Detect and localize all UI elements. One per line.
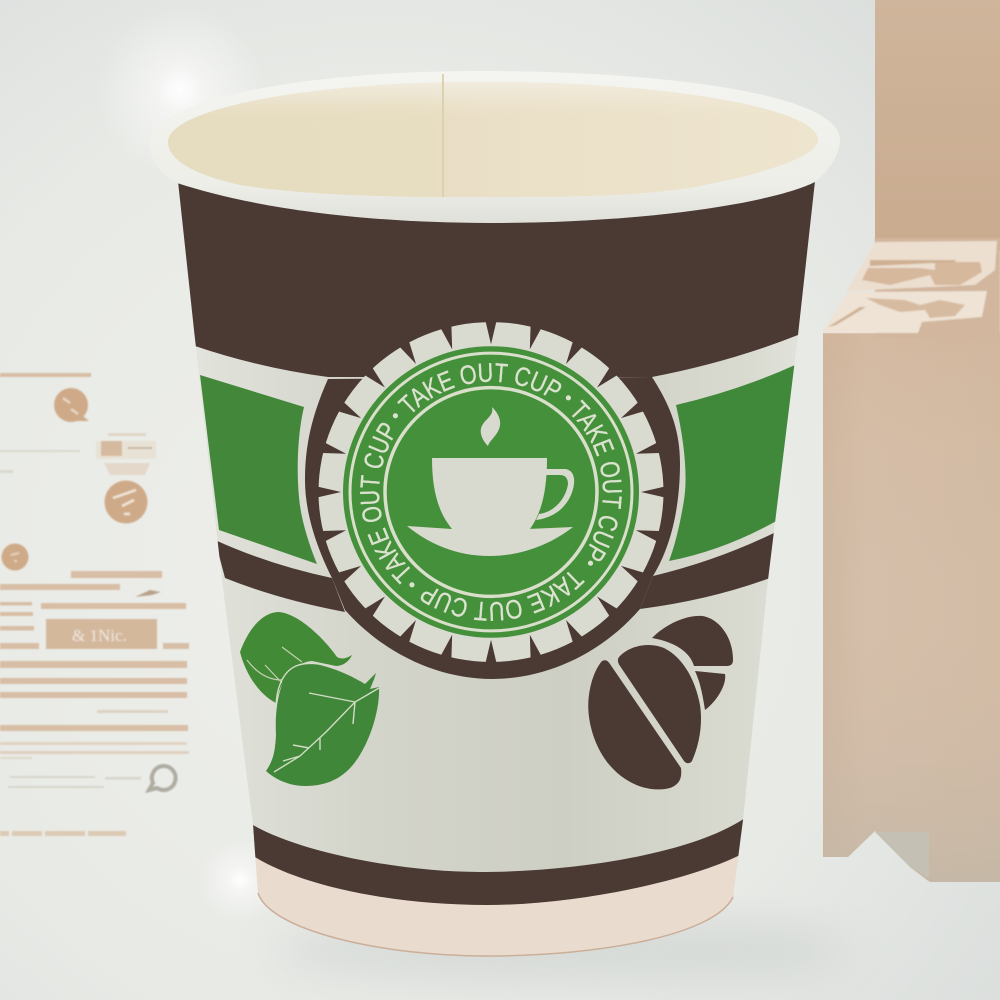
outer white ring xyxy=(350,353,632,631)
saucer xyxy=(407,526,573,556)
label block xyxy=(46,619,157,649)
medallion xyxy=(305,322,680,679)
icon: round badge xyxy=(104,480,148,524)
icon: label box xyxy=(96,433,156,475)
icon: green leaves xyxy=(240,612,379,786)
seam xyxy=(442,74,444,197)
cup bowl xyxy=(432,458,547,529)
panel: upper cardboard box xyxy=(875,0,1000,250)
rim xyxy=(150,71,840,223)
circular text: TAKE OUT CUP xyxy=(572,400,622,562)
separator dots xyxy=(392,394,594,588)
circular text: TAKE OUT CUP xyxy=(420,572,585,621)
text bars xyxy=(0,571,189,649)
top brown band xyxy=(170,170,830,377)
back leaf xyxy=(240,612,352,703)
front leaf xyxy=(266,664,379,786)
lower brown band xyxy=(215,530,780,612)
paper wall xyxy=(196,335,798,872)
big bean left half xyxy=(588,660,681,789)
label block: & 1Nic. xyxy=(72,626,127,645)
inner white ring xyxy=(385,388,597,596)
small grey lines xyxy=(0,450,80,473)
base outline xyxy=(258,893,733,956)
right green band xyxy=(669,365,795,561)
back bean lower xyxy=(695,671,725,710)
panel: left blurred document xyxy=(0,373,189,836)
wide bars xyxy=(0,661,189,759)
icon: small round badge xyxy=(2,544,28,570)
bottom base tint xyxy=(256,856,738,956)
steam xyxy=(481,407,500,446)
dashed footer bar xyxy=(0,831,126,836)
top rule xyxy=(0,373,91,377)
icon: coffee beans xyxy=(588,616,733,789)
handle xyxy=(536,469,574,520)
circular text: TAKE OUT CUP xyxy=(397,363,562,412)
left green band xyxy=(200,375,317,564)
big bean right half xyxy=(618,645,701,763)
back leaf veins xyxy=(247,647,302,683)
cup xyxy=(168,71,840,957)
cup body xyxy=(170,170,830,970)
small grey lines xyxy=(8,776,141,788)
back bean upper xyxy=(652,616,733,666)
panel: lower cardboard box xyxy=(823,333,1000,882)
circular text: TAKE OUT CUP xyxy=(360,422,410,584)
gear teeth xyxy=(311,315,671,669)
gear and badge xyxy=(318,322,664,662)
icon: grey speech ring xyxy=(149,766,176,790)
panel: torn flap graphics xyxy=(823,238,1000,338)
circular text xyxy=(360,363,622,621)
bottom stripe xyxy=(253,818,745,905)
green disc xyxy=(343,346,639,638)
icon: coffee cup and steam xyxy=(407,407,574,556)
inside of cup xyxy=(150,71,840,223)
inner wall xyxy=(168,82,818,197)
brown ring xyxy=(305,377,680,679)
front leaf outline and veins xyxy=(274,663,379,772)
icon: speech badge xyxy=(54,388,89,422)
inner top highlight xyxy=(168,82,818,197)
